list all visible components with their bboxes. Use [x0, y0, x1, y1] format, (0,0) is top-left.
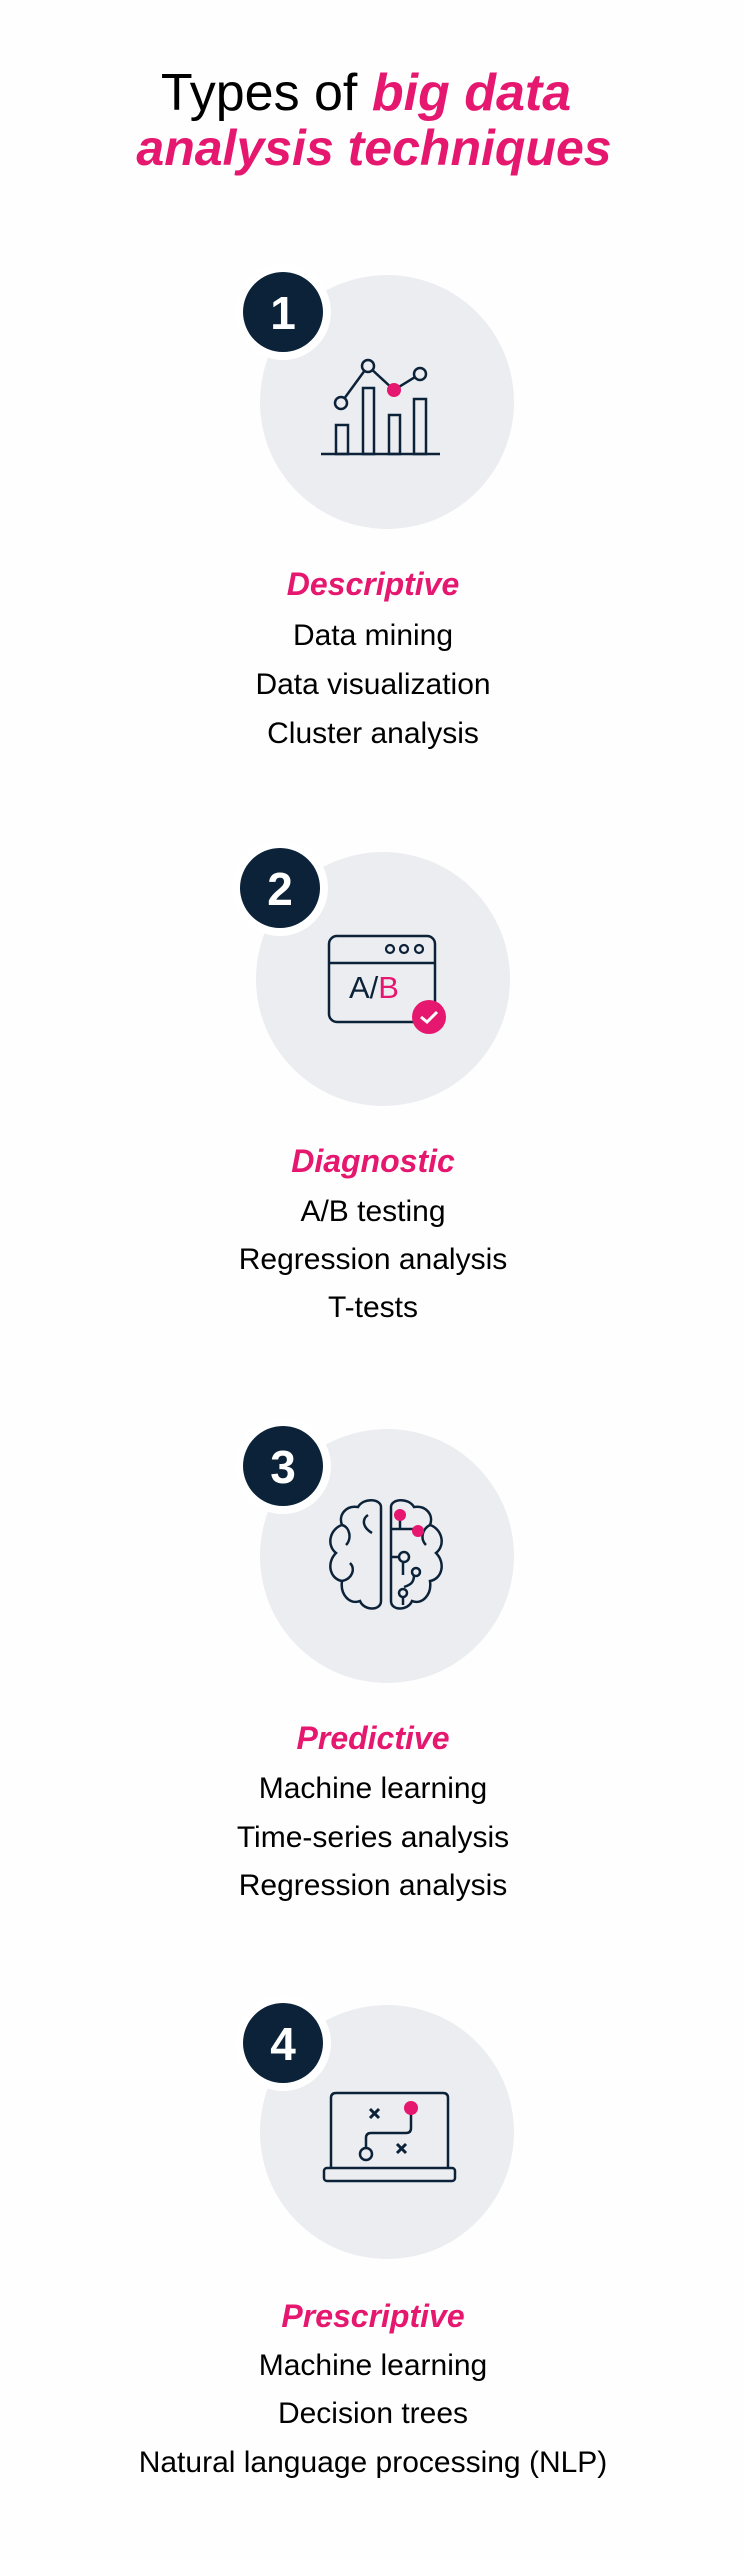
section 1: descriptive	[235, 264, 514, 750]
list: prescriptive techniques	[139, 2349, 607, 2479]
list: descriptive techniques: Cluster analysis	[267, 717, 479, 750]
heading: Predictive: Predictive	[297, 1720, 449, 1756]
badge 1: 1	[270, 287, 296, 339]
badge 3	[235, 1418, 331, 1514]
heading: Diagnostic: Diagnostic	[291, 1143, 455, 1179]
badge 2	[232, 840, 328, 936]
list: predictive techniques: Machine learning	[259, 1772, 487, 1805]
badge 3: 3	[270, 1441, 296, 1493]
badge 2: 2	[267, 863, 293, 915]
list: diagnostic techniques: Regression analysis	[239, 1243, 507, 1276]
list: descriptive techniques	[255, 619, 491, 750]
icon circle 3	[260, 1429, 514, 1683]
icon: brain	[330, 1500, 442, 1608]
list: descriptive techniques: Data visualization	[255, 668, 491, 701]
list: diagnostic techniques: A/B testing	[300, 1195, 446, 1228]
list: diagnostic techniques: T-tests	[328, 1291, 418, 1324]
title	[136, 64, 612, 176]
list: predictive techniques	[237, 1772, 509, 1902]
icon: bar chart	[321, 360, 440, 454]
icon: laptop with path	[324, 2093, 455, 2181]
icon: A/B browser window	[329, 936, 446, 1034]
list: prescriptive techniques: Decision trees	[278, 2397, 468, 2430]
list: prescriptive techniques: Natural language processing (NLP)	[139, 2446, 607, 2479]
icon: A/B browser window: A/B	[349, 970, 399, 1005]
list: prescriptive techniques: Machine learning	[259, 2349, 487, 2382]
list: descriptive techniques: Data mining	[293, 619, 453, 652]
icon circle 1	[260, 275, 514, 529]
heading: Descriptive: Descriptive	[287, 566, 459, 602]
list: diagnostic techniques	[239, 1195, 507, 1324]
badge 4	[235, 1995, 331, 2091]
heading: Prescriptive: Prescriptive	[281, 2298, 465, 2334]
section 2: diagnostic	[232, 840, 510, 1324]
icon circle 2	[256, 852, 510, 1106]
icon circle 4	[260, 2005, 514, 2259]
badge 1	[235, 264, 331, 360]
list: predictive techniques: Time-series analysis	[237, 1821, 509, 1854]
title: analysis techniques	[136, 120, 612, 176]
badge 4: 4	[270, 2018, 296, 2070]
title: Types of big data	[161, 64, 571, 122]
section 4: prescriptive	[139, 1995, 607, 2479]
list: predictive techniques: Regression analysis	[239, 1869, 507, 1902]
section 3: predictive	[235, 1418, 514, 1902]
